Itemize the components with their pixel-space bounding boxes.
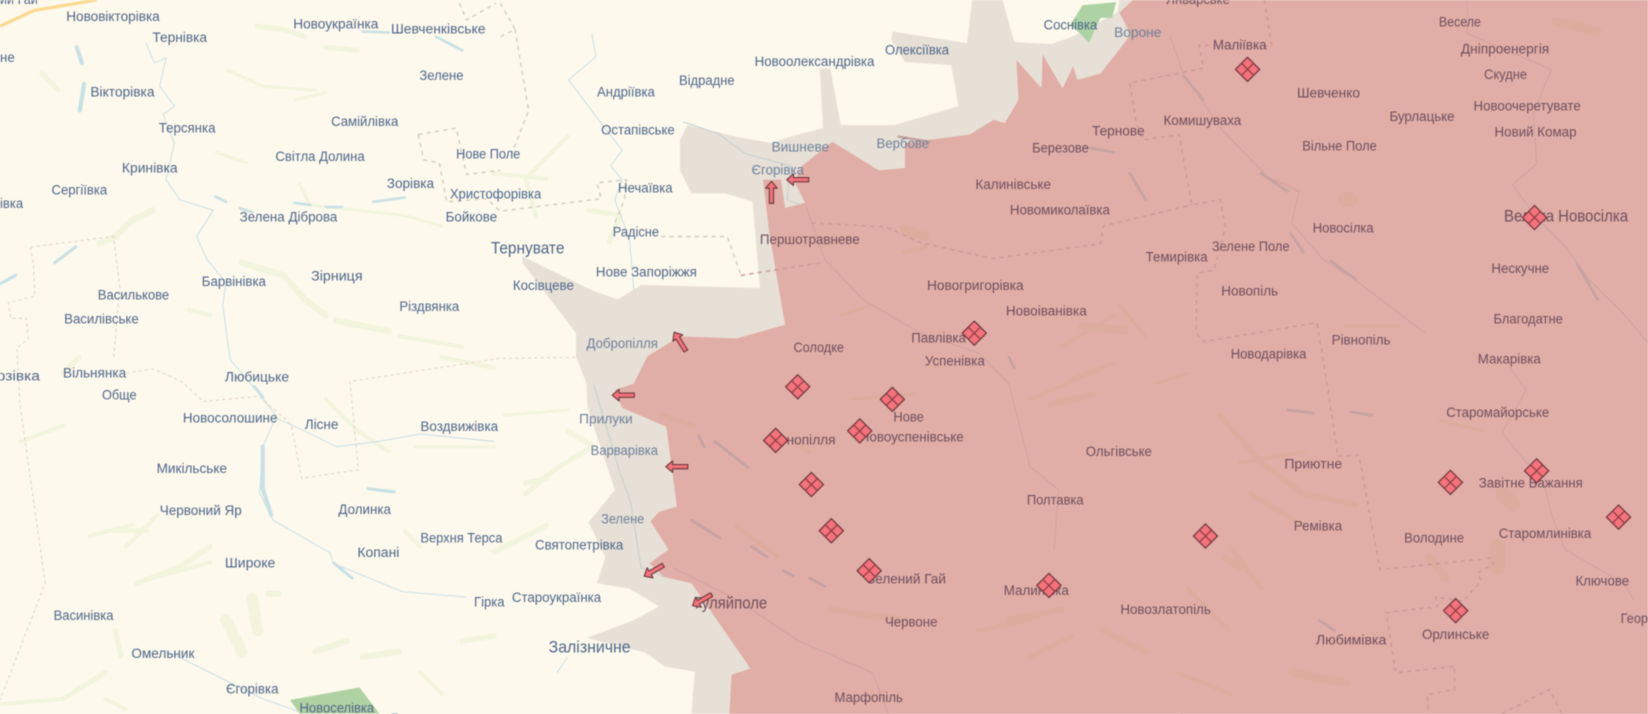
place labels: west xyxy=(0,0,1097,714)
place labels: occupied territory: Старомлинівка xyxy=(1499,526,1591,542)
place labels: occupied territory: Завітне Бажання xyxy=(1479,476,1583,492)
place labels: west: Зелене xyxy=(419,68,464,84)
place labels: west: Староукраїнка xyxy=(512,590,601,606)
place labels: west: Самійлівка xyxy=(331,114,398,130)
forest: Соснівка xyxy=(1070,2,1116,43)
place labels: occupied territory: Новодарівка xyxy=(1231,346,1307,362)
place labels: west: Долинка xyxy=(338,502,391,518)
place labels: west: Гірка xyxy=(474,594,505,610)
place labels: west: Нововікторівка xyxy=(66,9,160,25)
place labels: west: Новоолександрівка xyxy=(755,54,875,70)
place labels: west: Залізничне xyxy=(549,639,631,657)
place labels: occupied territory: Новоочеретувате xyxy=(1474,98,1581,114)
place labels: west: Новосолошине xyxy=(183,411,278,427)
place labels: occupied territory: Марфопіль xyxy=(835,690,903,706)
place labels: west: не xyxy=(0,50,15,66)
place labels: occupied territory: Першотравневе xyxy=(760,232,860,248)
place labels: west: Зірниця xyxy=(311,269,363,285)
place labels: west: Любицьке xyxy=(225,370,289,386)
place labels: west: Копані xyxy=(357,545,399,561)
place labels: grey zone: Прилуки xyxy=(579,412,633,428)
place labels: occupied territory: Червоне xyxy=(885,614,938,630)
place labels: west: Тернувате xyxy=(491,239,564,257)
place labels: grey zone: Вербове xyxy=(877,136,929,152)
place labels: west: Єгорівка xyxy=(226,682,279,698)
place labels: west: Олексіївка xyxy=(885,43,949,59)
place labels: occupied territory: Володине xyxy=(1404,530,1464,546)
place labels: occupied territory: Скудне xyxy=(1484,67,1527,83)
place labels: west: Нове Запоріжжя xyxy=(596,264,697,280)
occupied territory xyxy=(615,0,1648,714)
place labels: west: Кринівка xyxy=(122,160,178,176)
place labels: west: Тернівка xyxy=(152,30,207,46)
place labels: occupied territory: Ольгівське xyxy=(1086,444,1152,460)
place labels: occupied territory: Шевченко xyxy=(1297,86,1360,102)
place labels: west: Соснівка xyxy=(1044,17,1097,33)
place labels: occupied territory: Новозлатопіль xyxy=(1120,602,1211,618)
place labels: grey zone: Вороне xyxy=(1114,25,1161,41)
place labels: west: Остапівське xyxy=(601,123,675,139)
place labels: west: Різдвянка xyxy=(399,299,459,315)
place labels: occupied territory: Велика Новосілка xyxy=(1504,208,1629,226)
river in grey zone xyxy=(594,122,806,577)
place labels: west: Зорівка xyxy=(387,176,434,192)
place labels: occupied territory: Новопіль xyxy=(1221,283,1278,299)
place labels: occupied territory: Ремівка xyxy=(1294,519,1342,535)
place labels: occupied territory: Новоуспенівське xyxy=(860,429,964,445)
icons: combat markers xyxy=(764,57,1631,623)
place labels: occupied territory: Вільне Поле xyxy=(1302,138,1377,154)
place labels: west: Світла Долина xyxy=(275,149,365,165)
place labels: occupied territory: Бурлацьке xyxy=(1389,109,1455,125)
place labels: occupied territory: Новомиколаївка xyxy=(1010,202,1110,218)
place labels: occupied territory: Темирівка xyxy=(1146,250,1208,266)
place labels: occupied territory: Павлівка xyxy=(911,331,966,347)
place labels: occupied territory: Старомайорське xyxy=(1446,405,1549,421)
place labels: west: івка xyxy=(0,196,23,212)
place labels: grey zone: Добропілля xyxy=(586,336,658,352)
place labels: occupied territory: Солодке xyxy=(794,340,844,356)
place labels: occupied territory: Калинівське xyxy=(975,177,1051,193)
place labels: west: Микільське xyxy=(157,461,227,477)
place labels: grey zone: Вишневе xyxy=(771,139,829,155)
place labels: west: Лісне xyxy=(305,417,339,433)
place labels: west: Широке xyxy=(225,556,275,572)
place labels: occupied territory: Благодатне xyxy=(1494,312,1563,328)
place labels: west: Нечаївка xyxy=(618,180,673,196)
place labels: west: Відрадне xyxy=(679,73,735,89)
place labels: occupied territory: Новоіванівка xyxy=(1006,303,1087,319)
place labels: west: Васинівка xyxy=(54,608,114,624)
place labels: west: Обще xyxy=(102,387,137,403)
place labels: occupied territory: Рівнопіль xyxy=(1332,333,1391,349)
place labels: occupied territory: Маліївка xyxy=(1213,37,1267,53)
place labels: west: Косівцеве xyxy=(513,278,574,294)
place labels: west: Терсянка xyxy=(159,120,216,136)
place labels: occupied territory: Приютне xyxy=(1284,457,1342,473)
place labels: west: Барвінівка xyxy=(202,274,266,290)
place labels: west: Зелена Діброва xyxy=(240,210,337,226)
place labels: west: Нове Поле xyxy=(456,147,520,163)
place labels: occupied territory: Успенівка xyxy=(925,354,985,370)
place labels: west: Вільнянка xyxy=(63,365,126,381)
place labels: occupied territory: Полтавка xyxy=(1027,492,1084,508)
place labels: occupied territory: Тернове xyxy=(1092,124,1145,140)
place labels: west: Василькове xyxy=(98,288,169,304)
place labels: west: Сергіївка xyxy=(52,182,107,198)
place labels: west: Андріївка xyxy=(597,85,655,101)
place labels: west: Христофорівка xyxy=(450,187,541,203)
arrows: attack directions xyxy=(612,174,809,611)
place labels: occupied territory: Нове xyxy=(893,409,924,425)
place labels: occupied territory: Новий Комар xyxy=(1495,125,1577,141)
place labels: occupied territory: Зелене Поле xyxy=(1212,239,1290,255)
place labels: occupied territory: Дніпроенергія xyxy=(1461,42,1549,58)
rivers on open land xyxy=(146,34,634,714)
place labels: occupied territory: Гуляйполе xyxy=(695,595,767,613)
place labels: occupied territory: Орлинське xyxy=(1422,627,1489,643)
place labels: west: Шевченківське xyxy=(391,22,486,38)
place labels: west: Святопетрівка xyxy=(535,538,623,554)
place labels: occupied territory: Малинівка xyxy=(1004,583,1069,599)
place labels: occupied territory: Макарівка xyxy=(1478,352,1541,368)
place labels: occupied territory xyxy=(695,0,1648,714)
place labels: occupied territory: Рівнопілля xyxy=(767,433,836,449)
place labels: occupied territory: Любимівка xyxy=(1316,632,1386,648)
place labels: west: Бойкове xyxy=(446,210,497,226)
place labels: grey zone: Варварівка xyxy=(591,443,658,459)
place labels: occupied territory: Веселе xyxy=(1439,14,1481,30)
vegetation patches xyxy=(0,26,620,709)
grey zone xyxy=(522,0,1167,714)
dashed borders on occupied territory xyxy=(741,0,1562,714)
place labels: occupied territory: Новосілка xyxy=(1313,220,1374,236)
place labels: occupied territory: Ключове xyxy=(1575,573,1629,589)
place labels: west: Новоукраїнка xyxy=(293,16,378,32)
forest: Новоселівка xyxy=(290,687,379,714)
reservoirs on occupied territory xyxy=(692,76,1598,631)
place labels: occupied territory: Зелений Гай xyxy=(867,571,946,587)
place labels: grey zone: Єгорівка xyxy=(751,162,804,178)
place labels: west: Вікторівка xyxy=(90,85,155,101)
dashed borders on open land xyxy=(418,3,741,275)
terrain on occupied territory xyxy=(662,21,1598,694)
place labels: occupied territory: Березове xyxy=(1032,140,1089,156)
place labels: west: Радісне xyxy=(613,224,659,240)
road xyxy=(0,0,97,26)
place labels: grey zone xyxy=(579,25,1161,527)
place labels: west: Воздвижівка xyxy=(420,419,498,435)
place labels: west: Василівське xyxy=(64,312,139,328)
place labels: occupied territory: Нескучне xyxy=(1491,261,1549,277)
lakes xyxy=(0,32,462,578)
place labels: occupied territory: Комишуваха xyxy=(1163,113,1241,129)
place labels: west: Верхня Терса xyxy=(420,530,502,546)
place labels: west: Червоний Яр xyxy=(160,503,242,519)
place labels: occupied territory: Новогригорівка xyxy=(927,278,1024,294)
rivers on occupied territory xyxy=(673,0,1648,714)
place labels: west: Омельник xyxy=(131,646,195,662)
place labels: grey zone: Зелене xyxy=(601,511,644,527)
